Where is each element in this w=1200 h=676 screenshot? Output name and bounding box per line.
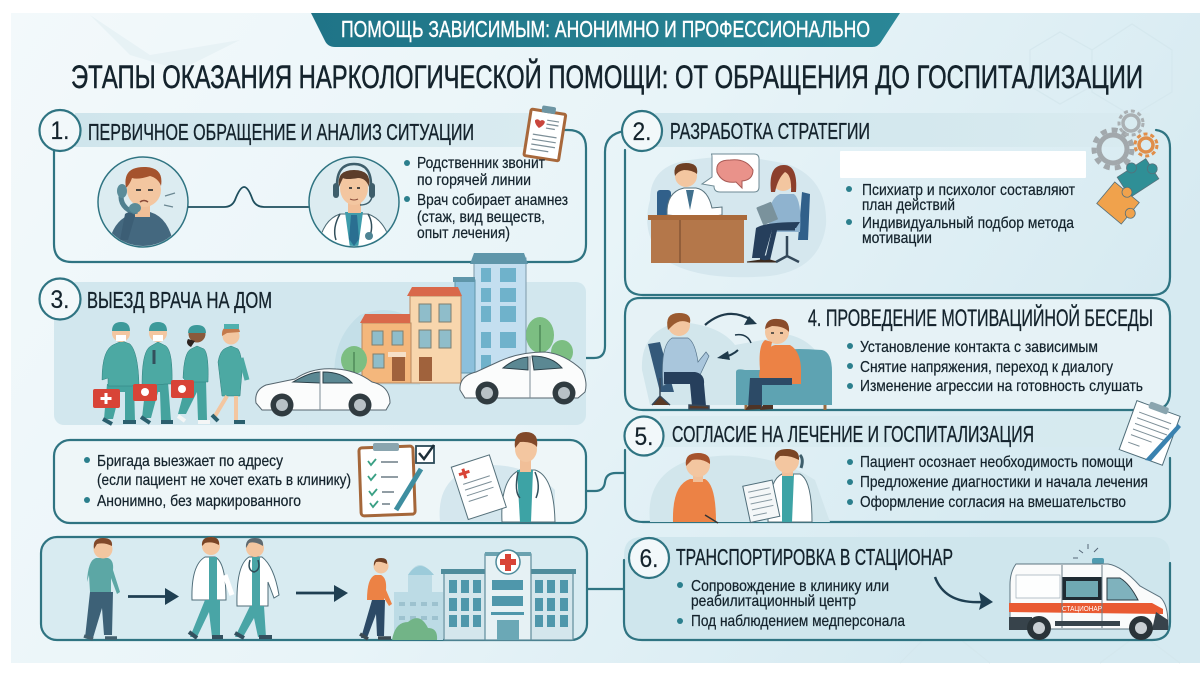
text: step 2 bullets: мотивации <box>862 230 932 247</box>
text: step 1 bullets: опыт лечения) <box>417 225 510 242</box>
number 2: 2. <box>632 118 652 146</box>
text: step 5 bullets: Пациент осознает необходимость помощи <box>860 454 1133 471</box>
text: step 2 bullets: Психиатр и психолог составляют <box>862 182 1076 199</box>
illustration: buildings <box>334 253 573 385</box>
number 6 <box>629 538 669 578</box>
panel: step 6 <box>624 537 1170 640</box>
text: step 6 bullets <box>677 578 905 630</box>
text: step 1 bullets: по горячей линии <box>417 172 531 189</box>
connector: bullets to step 5 <box>586 473 625 491</box>
number 5: 5. <box>634 423 654 451</box>
panel: step 5 <box>624 397 1182 523</box>
heading 6: ТРАНСПОРТИРОВКА В СТАЦИОНАР <box>676 544 953 570</box>
text: crew bullets <box>84 453 351 510</box>
icon: call-centre doctor <box>309 157 399 248</box>
phone line <box>188 187 309 207</box>
icon: car sedan <box>256 369 390 416</box>
number 2 <box>622 111 662 151</box>
text: crew bullets: (если пациент не хочет ехать в клинику) <box>97 472 351 489</box>
number 3 <box>40 278 80 320</box>
illustration: doctor and psychologist <box>647 154 826 277</box>
illustration: patient and doctor signing <box>650 449 830 523</box>
icon: gears <box>1094 111 1157 168</box>
heading 3: ВЫЕЗД ВРАЧА НА ДОМ <box>87 287 272 313</box>
text: step 1 bullets: Родственник звонит <box>417 155 546 172</box>
text: step 4 bullets: Установление контакта с зависимым <box>860 339 1098 356</box>
panel: crew bullets <box>54 432 586 523</box>
illustration: medic team <box>93 322 247 424</box>
figure: patient walking <box>84 538 120 639</box>
text: step 2 bullets: Индивидуальный подбор метода <box>862 215 1074 232</box>
doctor one <box>189 537 232 638</box>
text: step 5 bullets: Предложение диагностики и начала лечения <box>860 474 1148 491</box>
icon: ambulance <box>1009 544 1168 640</box>
panel: step 1 <box>40 103 586 262</box>
heading 5: СОГЛАСИЕ НА ЛЕЧЕНИЕ И ГОСПИТАЛИЗАЦИЯ <box>672 421 1034 447</box>
panel: step 2 <box>622 111 1170 295</box>
doctor two <box>235 538 279 638</box>
number 5 <box>624 416 664 456</box>
illustration: doctor with document <box>440 432 555 522</box>
banner: ПОМОЩЬ ЗАВИСИМЫМ: АНОНИМНО И ПРОФЕССИОНАЛЬНО <box>341 16 870 42</box>
white box <box>840 151 1086 178</box>
connector: step 3 to step 2 <box>584 131 625 358</box>
figure: patient at hospital <box>360 558 392 639</box>
panel: step 3 <box>40 253 586 425</box>
illustration: motivational talk <box>642 313 832 410</box>
icon: clipboard and pen <box>1119 397 1182 465</box>
medic 1 <box>93 322 139 424</box>
number 6: 6. <box>640 545 658 573</box>
number 1 <box>40 110 80 151</box>
icon: puzzle pieces <box>1097 152 1163 227</box>
figure: doctors walking <box>189 537 279 638</box>
number 1: 1. <box>50 117 70 145</box>
text: step 4 bullets: Снятие напряжения, переход к диалогу <box>860 359 1113 376</box>
illustration: hospital buildings <box>392 550 576 640</box>
arrow: first <box>128 588 179 605</box>
text: crew bullets: Бригада выезжает по адресу <box>97 453 283 470</box>
panel: route to hospital <box>41 537 587 640</box>
text: step 4 bullets: Изменение агрессии на готовность слушать <box>860 378 1143 395</box>
number 3: 3. <box>50 286 70 314</box>
text: step 6 bullets: Под наблюдением медперсонала <box>691 613 905 630</box>
text: crew bullets: Анонимно, без маркированного <box>97 493 301 510</box>
icon: car hatchback <box>460 352 586 404</box>
icon: relative calling <box>98 157 188 248</box>
arrow: second <box>296 585 348 602</box>
text: step 2 bullets: план действий <box>862 197 955 214</box>
text: step 6 bullets: Сопровождение в клинику или <box>691 578 889 595</box>
text: step 6 bullets: реабилитационный центр <box>691 593 856 610</box>
text: step 5 bullets <box>847 454 1148 511</box>
text: step 1 bullets: (стаж, вид веществ, <box>417 209 545 226</box>
panel: step 4 <box>625 298 1170 410</box>
icon: checklist <box>359 443 434 516</box>
banner <box>311 13 900 47</box>
text: step 1 bullets: Врач собирает анамнез <box>417 192 568 209</box>
text: step 1 bullets <box>404 155 568 242</box>
arrow: to ambulance <box>935 577 993 610</box>
icon: clipboard with report <box>522 103 568 163</box>
medic 2 <box>133 322 173 423</box>
connector: transport to step 6 <box>587 588 624 590</box>
medic 4 <box>212 324 247 422</box>
text: step 2 bullets <box>846 182 1076 247</box>
heading 1: ПЕРВИЧНОЕ ОБРАЩЕНИЕ И АНАЛИЗ СИТУАЦИИ <box>88 119 474 145</box>
icon: ambulance: СТАЦИОНАР <box>1062 604 1102 613</box>
medic 3 <box>171 325 210 422</box>
heading 2: РАЗРАБОТКА СТРАТЕГИИ <box>670 118 870 144</box>
text: step 4 bullets <box>847 339 1143 395</box>
text: step 5 bullets: Оформление согласия на вмешательство <box>860 494 1126 511</box>
